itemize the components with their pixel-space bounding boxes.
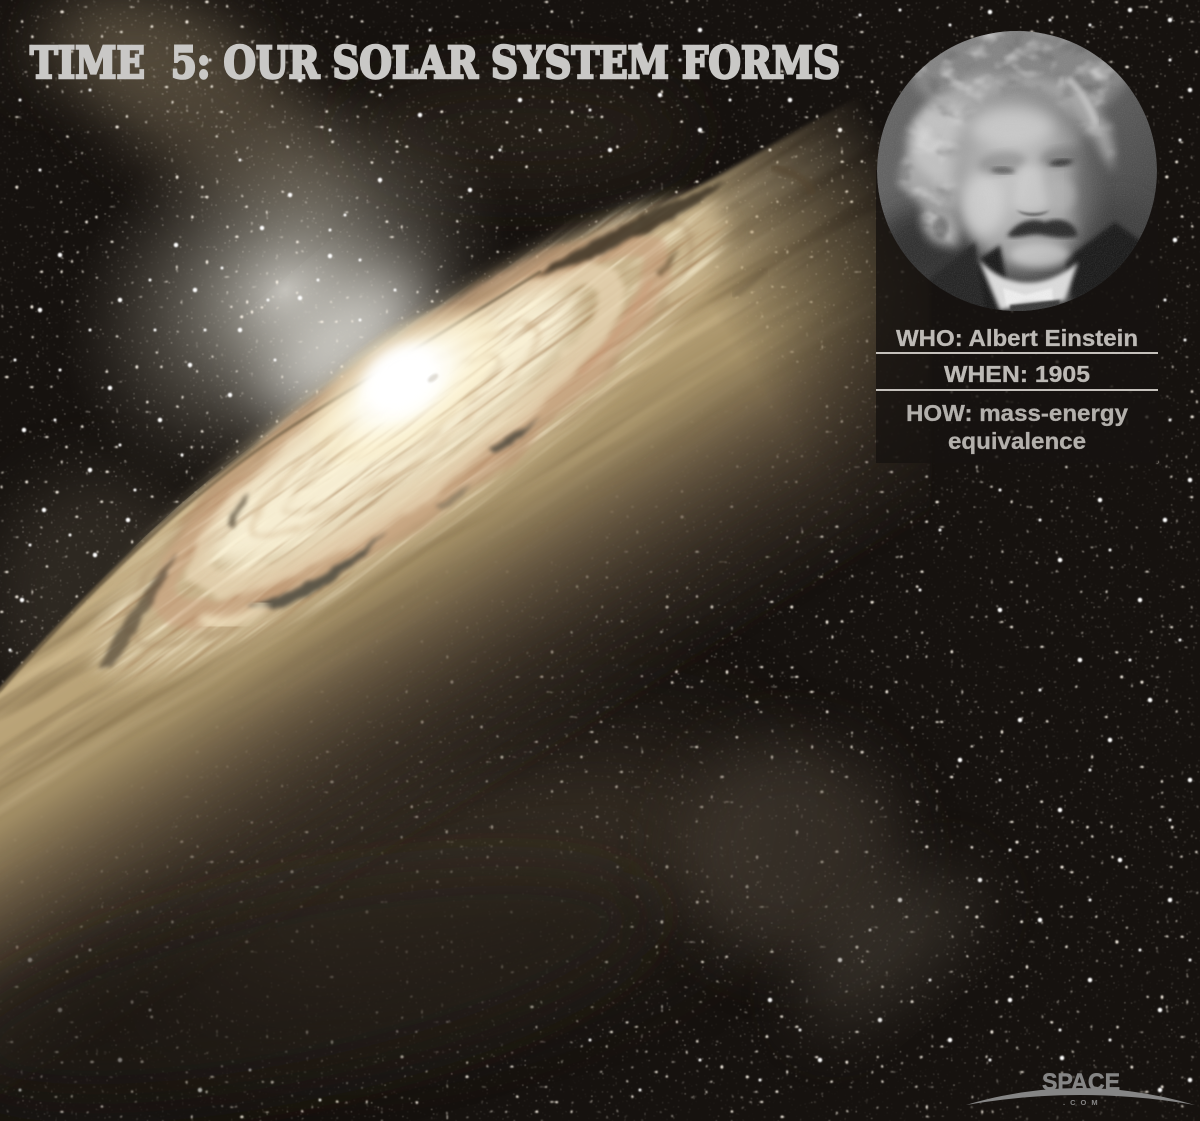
young sun: blazing core — [278, 270, 532, 500]
protoplanetary disc: outer dust sheet — [0, 104, 928, 1043]
disc: swirl rings — [44, 142, 771, 737]
disc: fine edge and highlight arcs — [0, 168, 812, 690]
dim veil over the lower left dust and stars — [0, 817, 672, 1121]
how: HOW: mass-energy — [906, 400, 1128, 426]
panel: discovery facts — [875, 22, 1160, 463]
nebula haze behind the disc — [0, 0, 690, 730]
pale ring — [172, 239, 642, 621]
salmon ring — [128, 196, 696, 662]
panel backing — [876, 170, 1158, 463]
logo: SPACE.com — [966, 1069, 1195, 1107]
who: WHO: Albert Einstein — [896, 325, 1138, 351]
divider — [876, 352, 1158, 354]
divider — [876, 389, 1158, 391]
title: TIME 5: OUR SOLAR SYSTEM FORMS — [30, 38, 840, 89]
when: WHEN: 1905 — [944, 361, 1090, 387]
inner bright disc — [185, 258, 603, 600]
logo: SPACE.com: SPACE — [1042, 1069, 1120, 1096]
portrait: Albert Einstein — [875, 22, 1160, 320]
soft spiral filaments — [84, 167, 734, 699]
nebula: white glow behind the young star — [0, 1, 588, 579]
bright gas next to the star — [240, 246, 450, 444]
disc: dark dust lanes — [100, 182, 725, 668]
head and shading — [944, 79, 1106, 277]
logo: SPACE.com: .COM — [1063, 1098, 1103, 1107]
pale outer band — [44, 142, 771, 737]
lower dust haze — [142, 696, 1003, 1064]
panel: discovery facts: equivalence — [948, 428, 1086, 454]
